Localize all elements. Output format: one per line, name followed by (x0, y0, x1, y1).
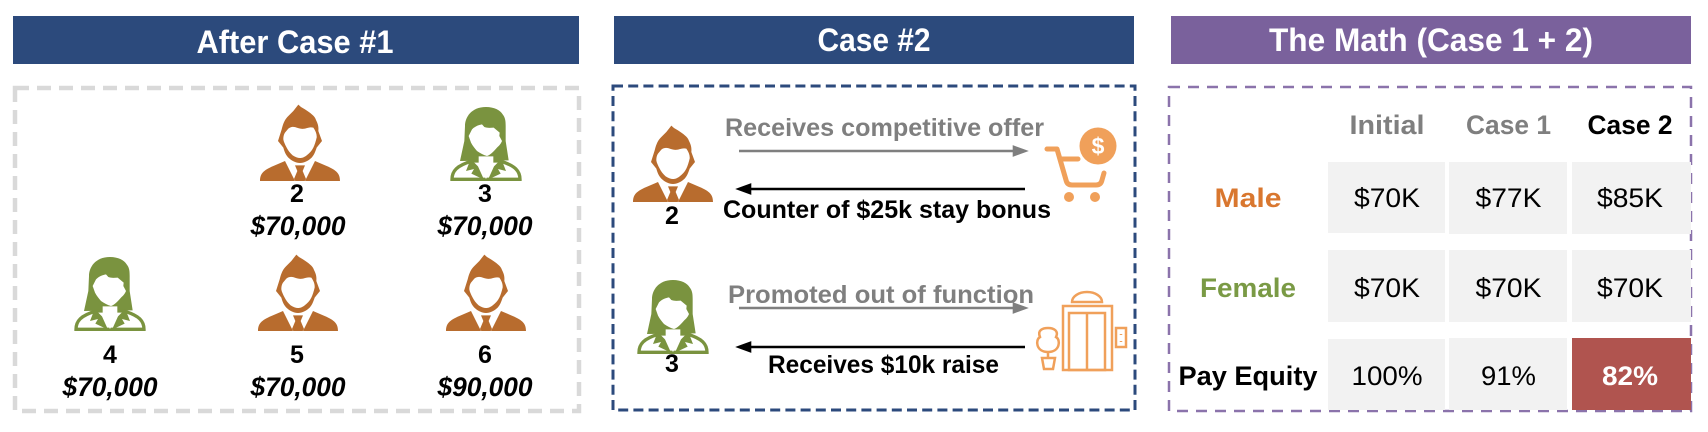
panel: case 2 (613, 86, 1135, 410)
row: pay equity: 82% (1602, 361, 1658, 391)
column headers: Case 1 (1466, 110, 1551, 140)
icon: shopping cart with dollar coin: $ (1092, 133, 1105, 159)
row: male: $77K (1476, 183, 1542, 213)
header: Case #2: Case #2 (818, 22, 930, 58)
row: pay equity: 91% (1481, 361, 1536, 391)
person 4: female, $70,000: $70,000 (62, 372, 158, 402)
arrow: promotion to right (739, 304, 1025, 312)
row: female: $70K (1354, 273, 1420, 303)
person 3: female, $70,000: 3 (478, 180, 492, 208)
arrow: offer to right (739, 147, 1025, 155)
person 6: male, $90,000 (437, 255, 532, 402)
column headers (1350, 110, 1672, 140)
row: female: $70K (1476, 273, 1542, 303)
person 4: female, $70,000 (62, 257, 158, 402)
label: receives competitive offer: Receives competitive offer (725, 114, 1044, 142)
label: receives $10k raise: Receives $10k raise (768, 351, 999, 379)
row: female: $70K (1597, 273, 1663, 303)
person 5: male, $70,000: 5 (290, 341, 304, 369)
row: pay equity (1178, 338, 1691, 410)
person 5: male, $70,000 (250, 255, 346, 402)
header: After Case #1 (13, 16, 579, 64)
arrow: counter to left (739, 185, 1025, 193)
label: promoted out of function: Promoted out of function (728, 281, 1034, 309)
panel: the math table (1169, 87, 1691, 411)
person 3 promoted (639, 280, 707, 378)
row: female (1200, 250, 1691, 322)
person 3: female, $70,000: $70,000 (437, 211, 532, 241)
row: pay equity: 100% (1352, 361, 1422, 391)
icon: elevator with plant (1037, 292, 1126, 370)
person 2: male, $70,000 (250, 105, 346, 241)
person 6: male, $90,000: 6 (478, 341, 492, 369)
column headers: Case 2 (1588, 110, 1672, 140)
label: counter of $25k stay bonus: Counter of $25k stay bonus (723, 196, 1051, 224)
person 6: male, $90,000: $90,000 (437, 372, 532, 402)
row: male: $70K (1354, 183, 1420, 213)
column headers: Initial (1350, 110, 1424, 140)
row: male (1214, 162, 1691, 234)
person 4: female, $70,000: 4 (103, 341, 117, 369)
row: pay equity: Pay Equity (1178, 361, 1318, 391)
row: female: Female (1200, 273, 1296, 303)
arrow: raise to left (739, 343, 1025, 351)
person 2 with competitive offer: 2 (665, 202, 679, 230)
row: male: Male (1214, 183, 1282, 213)
person 2: male, $70,000: $70,000 (250, 211, 346, 241)
header: The Math: The Math (Case 1 + 2) (1269, 22, 1593, 58)
person 3 promoted: 3 (665, 350, 679, 378)
panel: after case 1 (15, 88, 579, 411)
icon: shopping cart with dollar coin (1047, 128, 1116, 202)
person 5: male, $70,000: $70,000 (250, 372, 346, 402)
person 2 with competitive offer (633, 126, 713, 230)
header: After Case #1: After Case #1 (196, 24, 394, 60)
header: Case #2 (614, 16, 1134, 64)
person 2: male, $70,000: 2 (290, 180, 304, 208)
row: male: $85K (1597, 183, 1663, 213)
person 3: female, $70,000 (437, 107, 532, 241)
header: The Math (1171, 16, 1691, 64)
